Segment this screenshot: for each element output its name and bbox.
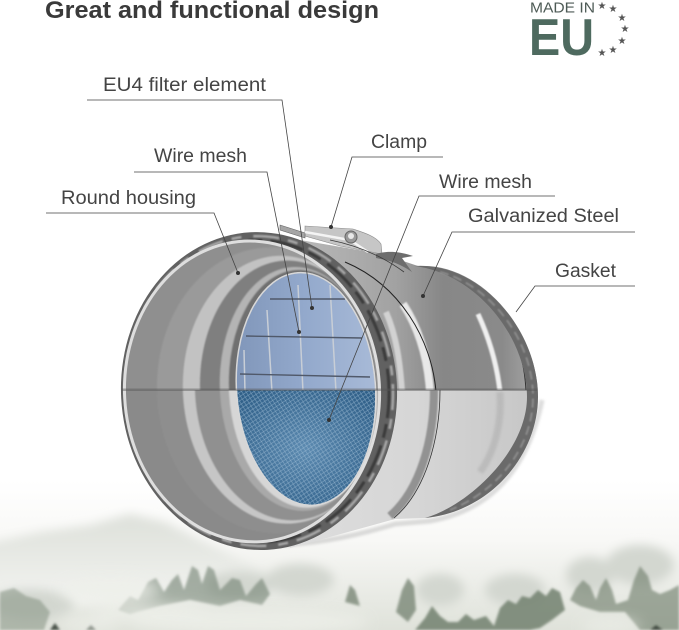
logo: made in EU: ★	[598, 48, 607, 59]
logo: made in EU: ★	[618, 36, 627, 47]
drifting fog	[60, 578, 640, 630]
photo seam	[122, 388, 537, 391]
callout: galvanized steel	[421, 206, 635, 298]
window rim	[229, 268, 383, 510]
logo: made in EU	[529, 0, 630, 67]
logo: made in EU: ★	[609, 45, 618, 56]
callout: gasket	[516, 261, 635, 312]
callout: wire mesh (fine): Wire mesh	[439, 172, 532, 193]
lower wire mesh	[237, 390, 376, 505]
logo: made in EU: EU	[529, 9, 594, 67]
callout: wire mesh (fine)	[327, 172, 555, 422]
callout: wire mesh (grid)	[134, 146, 301, 334]
callout: gasket: Gasket	[555, 261, 617, 282]
product: round filter housing	[113, 225, 542, 557]
callout: clamp	[329, 132, 443, 229]
housing body lower half	[290, 385, 538, 548]
bead highlights	[403, 304, 430, 392]
far tree line	[0, 545, 674, 621]
callout: clamp: Clamp	[371, 132, 427, 153]
background: misty forest	[0, 480, 679, 630]
logo: made in EU: ★	[609, 4, 618, 15]
callout: round housing	[46, 188, 240, 275]
misty hill	[0, 514, 300, 610]
interior upper half	[126, 242, 378, 390]
clamp	[280, 225, 413, 272]
callout: round housing: Round housing	[61, 188, 196, 209]
logo: made in EU: ★	[621, 24, 630, 35]
logo: made in EU: ★	[618, 13, 627, 24]
gasket	[415, 266, 538, 518]
front ring	[113, 225, 405, 557]
soft shadow	[200, 400, 542, 545]
logo: made in EU: ★	[598, 1, 607, 12]
callout: EU4 filter element	[87, 75, 314, 310]
interior lower half	[126, 390, 378, 540]
callout: wire mesh (grid): Wire mesh	[154, 146, 247, 167]
callout: galvanized steel: Galvanized Steel	[468, 206, 619, 227]
logo: made in EU: MADE IN	[530, 0, 595, 16]
EU4 filter element with wire grid	[237, 273, 375, 390]
callout: EU4 filter element: EU4 filter element	[103, 75, 267, 96]
housing body upper half	[300, 240, 538, 400]
near trees	[0, 566, 679, 630]
filter window	[237, 273, 376, 505]
